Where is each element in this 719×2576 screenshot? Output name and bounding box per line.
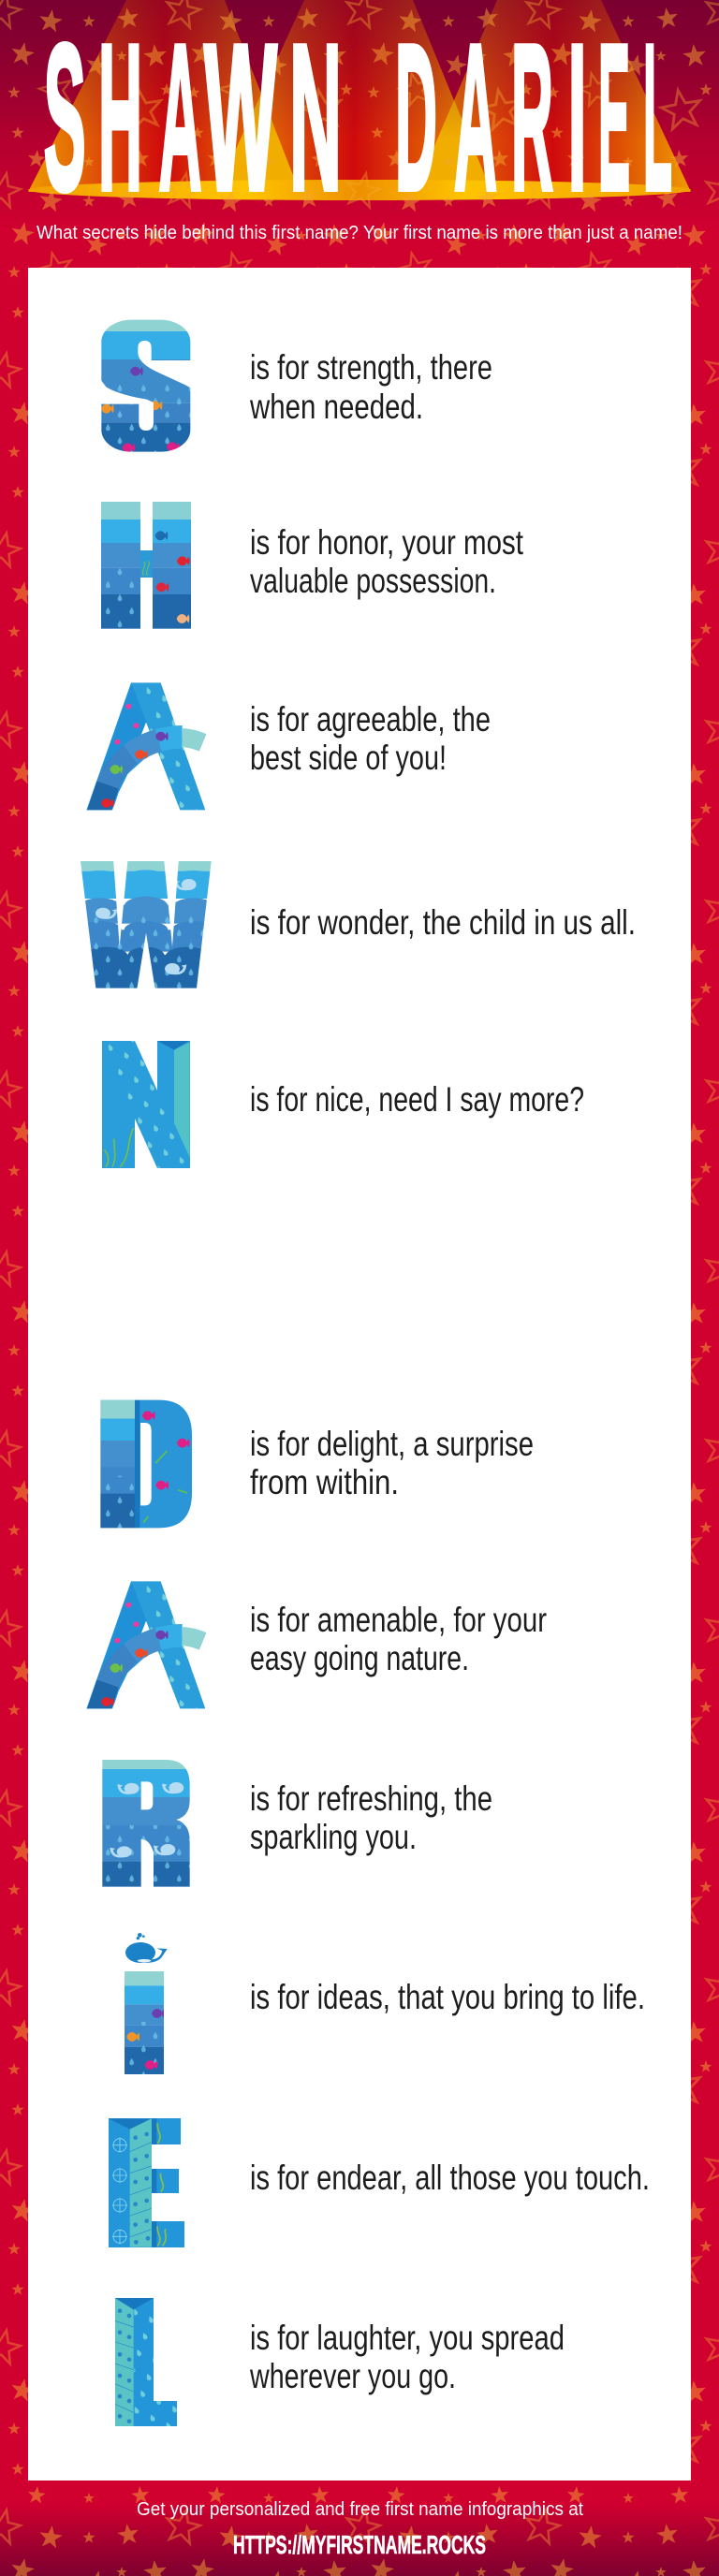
letter A second — [84, 1579, 209, 1713]
row: I — [124, 1933, 645, 2075]
subtitle: What secrets hide behind this first name? Your first name is more than just a name! — [37, 223, 682, 243]
title: I — [568, 2, 587, 234]
caption A second: easy going nature. — [250, 1639, 469, 1677]
icon: whale dot of the I — [125, 1933, 168, 1963]
caption R — [250, 1779, 492, 1856]
caption R: is for refreshing, the — [250, 1779, 492, 1818]
letter R — [100, 1760, 194, 1888]
caption A second — [250, 1601, 547, 1677]
caption A — [250, 700, 491, 777]
title: H — [98, 2, 142, 234]
footer line: Get your personalized and free first name infographics at — [137, 2499, 583, 2520]
letter W — [78, 861, 215, 989]
title: W — [204, 2, 277, 234]
letter D — [98, 1398, 195, 1530]
spotlight beams — [28, 0, 691, 200]
row: A second — [84, 1579, 547, 1713]
caption A second: is for amenable, for your — [250, 1601, 547, 1639]
row: W — [78, 861, 636, 989]
letter L — [114, 2296, 180, 2427]
footer url: HTTPS://MYFIRSTNAME.ROCKS — [233, 2530, 486, 2559]
letter H — [100, 502, 194, 629]
title: D — [395, 2, 437, 234]
caption A: best side of you! — [250, 739, 447, 777]
letter N — [100, 1039, 194, 1170]
caption S: when needed. — [249, 388, 423, 426]
title: R — [511, 2, 553, 234]
letter A — [84, 681, 209, 814]
caption R: sparkling you. — [250, 1818, 417, 1856]
row: H — [100, 502, 524, 629]
caption S — [249, 348, 492, 426]
letter E — [106, 2117, 187, 2248]
title: A — [159, 2, 202, 234]
caption A: is for agreeable, the — [250, 700, 491, 739]
title: S — [44, 2, 86, 234]
caption N: is for nice, need I say more? — [250, 1080, 584, 1119]
caption H: is for honor, your most — [250, 523, 524, 562]
row: D — [98, 1398, 534, 1530]
letter I — [124, 1971, 166, 2075]
caption D: is for delight, a surprise — [250, 1425, 534, 1463]
caption L: wherever you go. — [249, 2357, 456, 2395]
row: A — [84, 681, 491, 814]
title: A — [454, 2, 497, 234]
caption L: is for laughter, you spread — [250, 2319, 565, 2357]
row: N — [100, 1039, 584, 1170]
letter S — [100, 318, 194, 452]
caption D — [250, 1425, 534, 1501]
panel: white content card — [28, 268, 691, 2481]
caption S: is for strength, there — [250, 348, 492, 387]
caption H — [250, 523, 524, 600]
row: R — [100, 1760, 492, 1888]
title: N — [289, 2, 342, 234]
row: E — [106, 2117, 650, 2248]
caption H: valuable possession. — [250, 562, 496, 600]
row: S — [100, 318, 492, 452]
caption W: is for wonder, the child in us all. — [250, 903, 636, 942]
caption L — [249, 2319, 565, 2395]
row: L — [114, 2296, 565, 2427]
caption D: from within. — [250, 1463, 399, 1501]
